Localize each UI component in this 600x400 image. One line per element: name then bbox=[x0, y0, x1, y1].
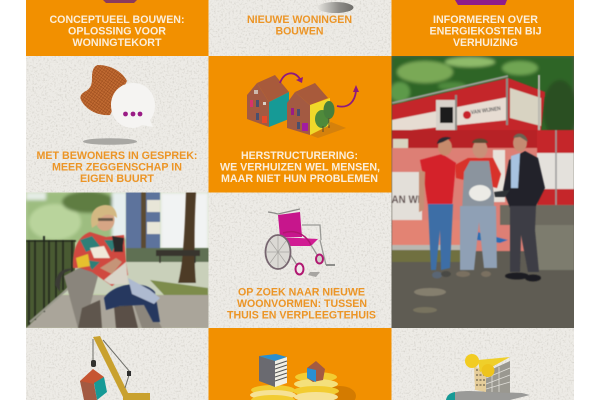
man with apron and helmet bbox=[455, 138, 501, 277]
heading: met bewoners: EIGEN BUURT bbox=[80, 173, 154, 185]
heading: herstructurering: WE VERHUIZEN WEL MENSEN, bbox=[220, 162, 380, 174]
heading: op zoek naar nieuwe woonvormen: OP ZOEK NAAR NIEUWE bbox=[238, 286, 365, 298]
man in dark jacket bbox=[494, 133, 545, 282]
heading: conceptueel bouwen: OPLOSSING VOOR bbox=[68, 26, 166, 38]
icon: speech bubble bbox=[111, 83, 155, 128]
heading: informeren: INFORMEREN OVER bbox=[433, 14, 538, 26]
icon: building on tap bbox=[446, 354, 530, 400]
foliage background bbox=[390, 56, 577, 140]
icon: two moving houses bbox=[247, 75, 346, 138]
icon: floating shadow bbox=[83, 138, 137, 145]
heading: nieuwe woningen: BOUWEN bbox=[276, 26, 324, 38]
heading: op zoek naar nieuwe woonvormen bbox=[227, 286, 376, 322]
heading: informeren: VERHUIZING bbox=[453, 37, 518, 49]
heading: nieuwe woningen bbox=[247, 14, 352, 38]
heading: nieuwe woningen: NIEUWE WONINGEN bbox=[247, 14, 352, 26]
park background bbox=[26, 191, 209, 250]
icon: book fragment bbox=[103, 0, 137, 3]
icon: wheelchair bbox=[266, 209, 335, 277]
heading: met bewoners: MEER ZEGGENSCHAP IN bbox=[52, 162, 182, 174]
site container bbox=[392, 75, 574, 328]
heading: conceptueel bouwen bbox=[50, 14, 184, 49]
icon: coin stacks with building and house bbox=[250, 354, 356, 400]
heading: herstructurering: HERSTRUCTURERING: bbox=[241, 150, 358, 162]
heading: conceptueel bouwen: CONCEPTUEEL BOUWEN: bbox=[50, 14, 184, 26]
banner text: AN WI bbox=[392, 194, 420, 206]
railing fence bbox=[26, 236, 76, 328]
panel: informeren over energiekosten bbox=[392, 0, 574, 56]
icon: stroopwafel bbox=[80, 65, 127, 115]
panel: building with yellow balls bbox=[392, 328, 574, 400]
building and trees bbox=[26, 192, 209, 328]
heading: informeren bbox=[430, 14, 542, 49]
icon: purple box fragment bbox=[455, 0, 507, 5]
woman bbox=[73, 205, 160, 322]
photo: three men at site office bbox=[390, 56, 577, 328]
panel: conceptueel bouwen bbox=[26, 0, 208, 56]
panel: coins and buildings bbox=[208, 328, 392, 400]
icon: shadow ellipse bbox=[318, 2, 354, 13]
heading: informeren: ENERGIEKOSTEN BIJ bbox=[430, 26, 542, 38]
icon: crane lifting house bbox=[80, 336, 150, 400]
heading: herstructurering bbox=[220, 150, 380, 185]
panel: herstructurering bbox=[208, 56, 392, 192]
panel: nieuwe woningen bouwen bbox=[208, 0, 392, 56]
bench bbox=[55, 262, 162, 328]
heading: met bewoners bbox=[36, 150, 198, 185]
heading: met bewoners: MET BEWONERS IN GESPREK: bbox=[36, 150, 198, 162]
panel: met bewoners in gesprek bbox=[26, 56, 208, 192]
panel: nieuwe woonvormen bbox=[208, 192, 392, 328]
photo: woman on park bench bbox=[26, 191, 209, 328]
arrow: between houses bbox=[280, 73, 303, 83]
arrow: out of second house bbox=[337, 85, 359, 107]
logo text on container: VAN WIJNEN bbox=[471, 106, 501, 116]
man in red shirt bbox=[419, 137, 456, 278]
heading: conceptueel bouwen: WONINGTEKORT bbox=[72, 37, 162, 49]
heading: op zoek naar nieuwe woonvormen: WOONVORMEN: TUSSEN bbox=[237, 298, 367, 310]
heading: op zoek naar nieuwe woonvormen: THUIS EN VERPLEEGTEHUIS bbox=[227, 310, 376, 322]
heading: herstructurering: MAAR NIET HUN PROBLEMEN bbox=[221, 173, 378, 185]
panel: crane with house bbox=[26, 328, 208, 400]
